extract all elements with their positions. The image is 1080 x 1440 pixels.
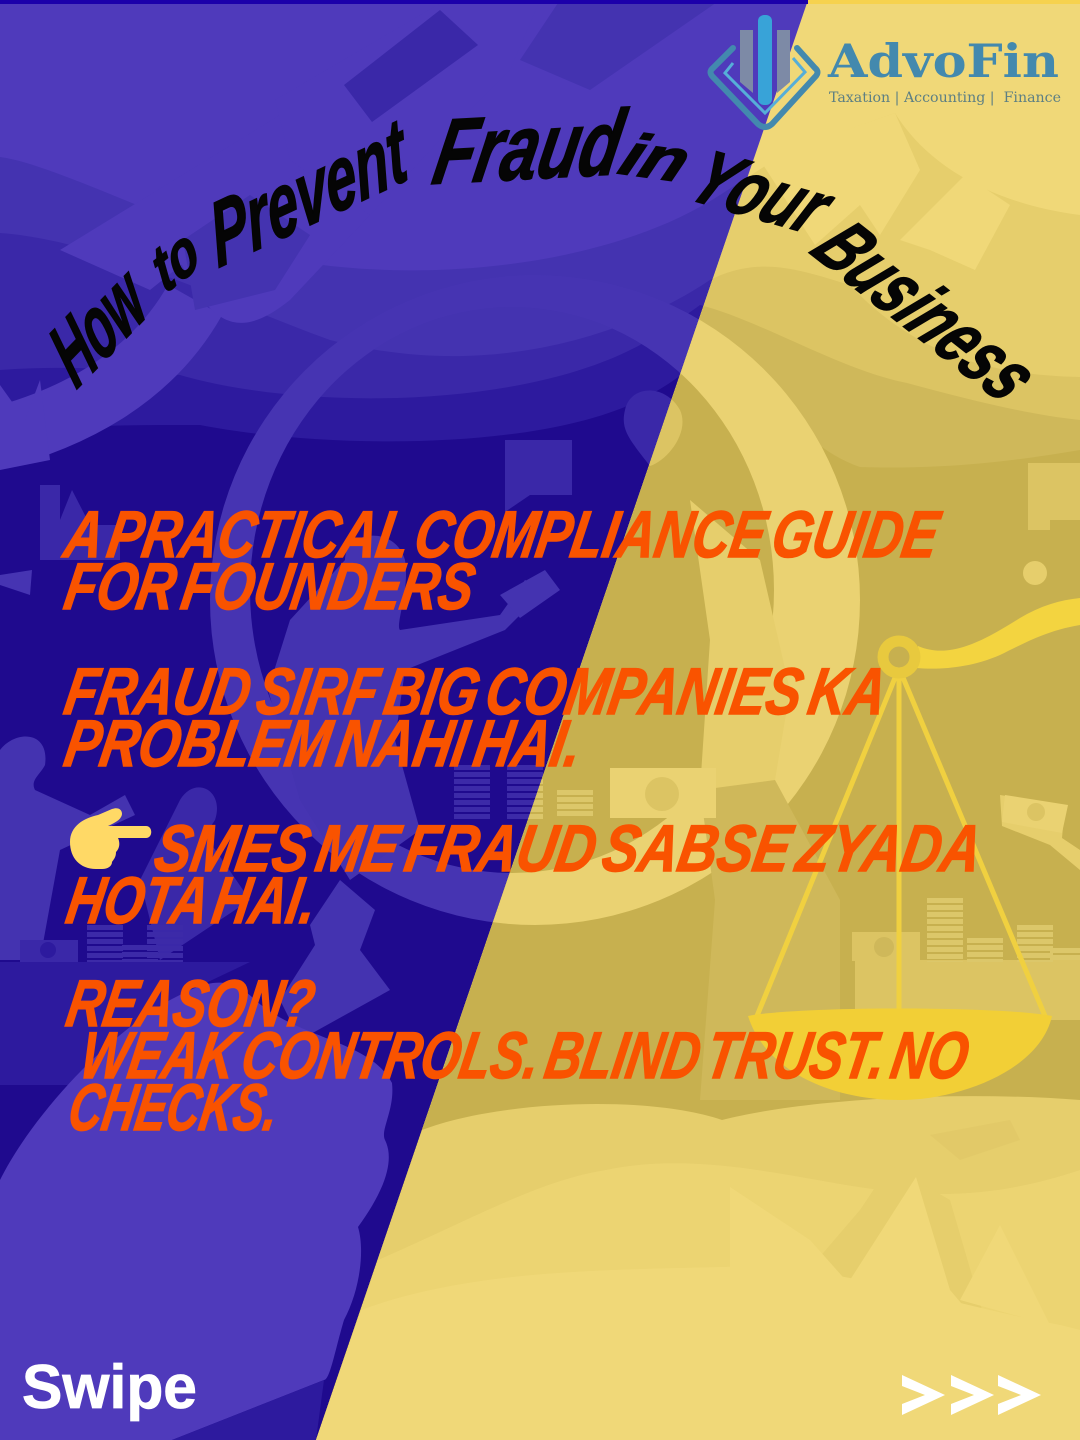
- line: fraud statement: FRAUD SIRF BIG COMPANIES KA: [59, 655, 892, 729]
- top edge strip: [0, 0, 1080, 4]
- title on arc: How: [35, 245, 163, 406]
- background right yellow panel: [316, 4, 1080, 1440]
- line: reason: REASON?: [61, 967, 320, 1041]
- logo icon: [710, 15, 818, 127]
- icon: pointing hand: [70, 808, 151, 869]
- title on arc: Prevent: [202, 97, 416, 287]
- arrow: next chevrons: [902, 1375, 1041, 1415]
- line: fraud statement: PROBLEM NAHI HAI.: [59, 707, 587, 781]
- logo tagline: Taxation | Accounting | Finance: [829, 90, 1061, 106]
- title on arc: in: [611, 121, 700, 194]
- body copy: [58, 498, 987, 1145]
- line: subtitle: [58, 498, 946, 624]
- line: reason: CHECKS.: [63, 1071, 284, 1145]
- logo: [710, 15, 1061, 127]
- background left purple panel: [0, 4, 742, 1440]
- title on arc: [35, 90, 1059, 414]
- swipe label: Swipe: [22, 1353, 197, 1422]
- line: subtitle: FOR FOUNDERS: [59, 550, 480, 624]
- line: reason: [61, 967, 974, 1145]
- line: fraud statement: [59, 655, 892, 781]
- title on arc: to: [142, 213, 209, 307]
- title on arc: Your: [675, 135, 850, 250]
- line: SMEs: [61, 812, 987, 938]
- illustration: balance scale: [748, 598, 1080, 1100]
- logo wordmark: AdvoFin: [827, 34, 1059, 88]
- line: SMEs: HOTA HAI.: [61, 864, 322, 938]
- title on arc: Fraud: [426, 90, 634, 204]
